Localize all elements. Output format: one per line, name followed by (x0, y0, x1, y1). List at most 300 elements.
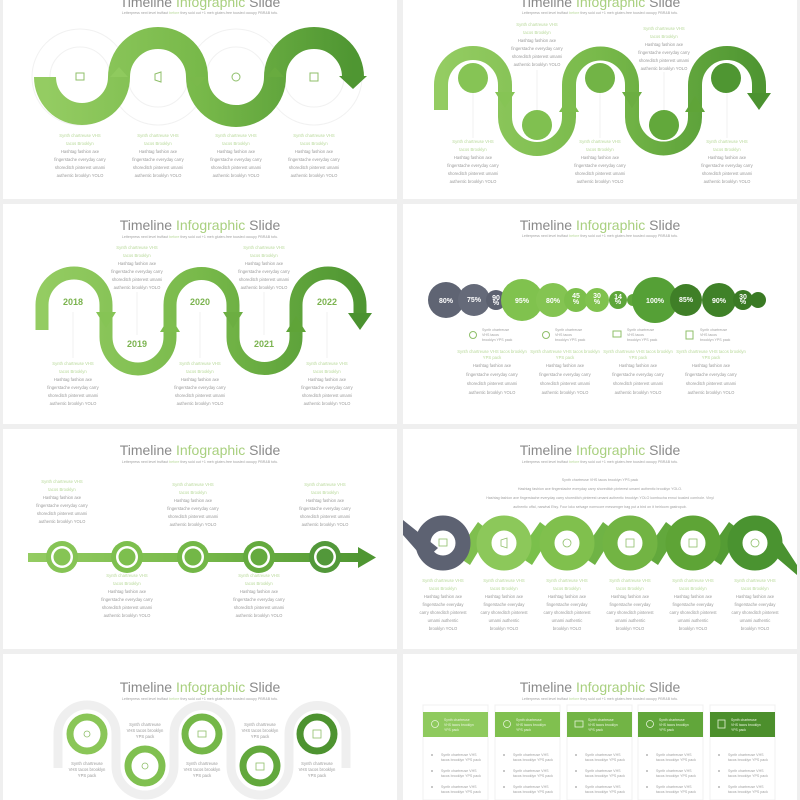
text blocks: Hashtag fashion axe (454, 155, 493, 160)
bubble chart: % (594, 299, 601, 306)
text blocks: Hashtag fashion axe (473, 363, 512, 368)
bubble chart: % (573, 299, 580, 306)
text blocks: tacos Brooklyn (48, 487, 76, 492)
text blocks: shoreditch pinterest umami (300, 514, 350, 519)
bubble chart (428, 277, 766, 323)
text blocks: Hashtag fashion axe (546, 363, 585, 368)
text blocks: shoreditch pinterest umami (239, 277, 289, 282)
text blocks: authentic brooklyn YOLO (615, 390, 662, 395)
connector lines (473, 70, 727, 138)
text blocks: tacos Brooklyn (300, 141, 328, 146)
text blocks: fingerstache everyday carry (685, 372, 738, 377)
text blocks: shoreditch pinterest umami (448, 171, 498, 176)
text blocks: shoreditch pinterest umami (211, 165, 261, 170)
text blocks: authentic brooklyn YOLO (114, 285, 161, 290)
text blocks: tacos Brooklyn (679, 586, 707, 591)
text blocks: tacos Brooklyn (179, 490, 207, 495)
text blocks (457, 349, 746, 395)
text blocks: umami authentic (489, 618, 519, 623)
text blocks (54, 133, 341, 178)
text blocks: Synth chartreuse VHS (238, 573, 280, 578)
text blocks: authentic brooklyn YOLO (236, 613, 283, 618)
text blocks: tacos Brooklyn (250, 253, 278, 258)
text blocks: Hashtag fashion axe (308, 377, 347, 382)
text blocks: Synth chartreuse VHS (706, 139, 748, 144)
bubble chart: 30 (593, 293, 601, 300)
text blocks: fingerstache everyday carry (174, 385, 227, 390)
text blocks: Hashtag fashion axe (692, 363, 731, 368)
text blocks: shoreditch pinterest umami (702, 171, 752, 176)
text blocks: tacos Brooklyn (66, 141, 94, 146)
text blocks: Hashtag fashion axe (181, 377, 220, 382)
text blocks: Hashtag fashion axe (174, 498, 213, 503)
circles (458, 63, 741, 140)
small texts: VHS tacos brooklyn (69, 767, 106, 772)
bubble chart: 100% (646, 298, 665, 305)
text blocks: fingerstache everyday (423, 602, 464, 607)
cards: tacos brooklyn YPS pack (441, 790, 481, 794)
small texts (69, 722, 336, 778)
years: 2022 (317, 297, 337, 307)
text blocks: authentic brooklyn YOLO (577, 179, 624, 184)
cards: Synth chartreuse VHS (656, 769, 692, 773)
text blocks: Synth chartreuse VHS (452, 139, 494, 144)
cards: YPS pack (444, 728, 459, 732)
text blocks: shoreditch pinterest umami (467, 381, 517, 386)
text blocks: tacos Brooklyn (59, 369, 87, 374)
icon rows: Synth chartreuse (555, 328, 582, 332)
serpentine arrow (42, 273, 372, 369)
text blocks: authentic brooklyn YOLO (39, 519, 86, 524)
bubble chart: 80% (439, 298, 454, 305)
cards: tacos brooklyn YPS pack (585, 774, 625, 778)
small texts: YPS pack (136, 734, 155, 739)
text blocks: Synth chartreuse VHS (516, 22, 558, 27)
text blocks: Synth chartreuse VHS (643, 26, 685, 31)
text blocks: tacos Brooklyn (616, 586, 644, 591)
arrow bar (28, 547, 376, 568)
small texts: YPS pack (78, 773, 97, 778)
text blocks: tacos Brooklyn (650, 34, 678, 39)
small texts: Synth chartreuse (129, 722, 161, 727)
text blocks: shoreditch pinterest umami (512, 54, 562, 59)
text blocks: Synth chartreuse VHS (579, 139, 621, 144)
text blocks: fingerstache everyday carry (539, 372, 592, 377)
intro paragraph: authentic offal, narwhal Etsy. Four loko selvage normcore messenger bag put a bird on it heirloom gastropub. (513, 505, 687, 509)
text blocks (419, 578, 779, 631)
cards: Synth chartreuse VHS (513, 769, 549, 773)
text blocks: authentic brooklyn YOLO (50, 401, 97, 406)
title: Timeline Infographic Slide (120, 217, 280, 233)
text blocks: Synth chartreuse VHS (106, 573, 148, 578)
cards: tacos brooklyn YPS pack (441, 758, 481, 762)
cards: tacos brooklyn YPS pack (585, 758, 625, 762)
icon rows: Synth chartreuse (700, 328, 727, 332)
bubble chart: 30 (739, 294, 747, 301)
bubble chart: 95% (515, 298, 530, 305)
text blocks: fingerstache everyday carry (233, 597, 286, 602)
text blocks: shoreditch pinterest umami (540, 381, 590, 386)
text blocks: shoreditch pinterest umami (289, 165, 339, 170)
cards: tacos brooklyn YPS pack (728, 790, 768, 794)
text blocks: shoreditch pinterest umami (639, 58, 689, 63)
text blocks: authentic brooklyn YOLO (304, 401, 351, 406)
text blocks: shoreditch pinterest umami (112, 277, 162, 282)
cards: VHS tacos brooklyn (444, 723, 474, 727)
bubble chart: 75% (467, 297, 482, 304)
text blocks: carry shoreditch pinterest (731, 610, 779, 615)
text blocks: Synth chartreuse VHS tacos brooklyn (676, 349, 746, 354)
cards: Synth chartreuse VHS (656, 753, 692, 757)
cards: Synth chartreuse VHS (728, 785, 764, 789)
text blocks: shoreditch pinterest umami (302, 393, 352, 398)
text blocks: authentic brooklyn YOLO (688, 390, 735, 395)
cards: Synth chartreuse VHS (441, 785, 477, 789)
title: Timeline Infographic Slide (520, 679, 680, 695)
text blocks: fingerstache everyday carry (101, 597, 154, 602)
text blocks (447, 22, 754, 184)
cards: Synth chartreuse VHS (441, 753, 477, 757)
panel: serpentine timeline with circles (403, 0, 797, 199)
text blocks: Synth chartreuse VHS (422, 578, 464, 583)
cards: Synth chartreuse VHS (585, 769, 621, 773)
icon rows: brooklyn YPS pack (555, 338, 586, 342)
text blocks: Hashtag fashion axe (118, 261, 157, 266)
text blocks: tacos Brooklyn (186, 369, 214, 374)
small texts: YPS pack (308, 773, 327, 778)
cards (423, 705, 775, 800)
cards: Synth chartreuse (444, 718, 470, 722)
text blocks: carry shoreditch pinterest (480, 610, 528, 615)
text blocks: fingerstache everyday (484, 602, 525, 607)
text blocks: shoreditch pinterest umami (168, 514, 218, 519)
panel: arrow line with milestone circles (3, 429, 397, 649)
text blocks: fingerstache everyday (547, 602, 588, 607)
small texts: YPS pack (193, 773, 212, 778)
text blocks: fingerstache everyday (735, 602, 776, 607)
icon rows: VHS tacos (700, 333, 717, 337)
cards: Synth chartreuse VHS (513, 753, 549, 757)
text blocks: carry shoreditch pinterest (606, 610, 654, 615)
text blocks: Synth chartreuse VHS (546, 578, 588, 583)
text blocks: Synth chartreuse VHS (609, 578, 651, 583)
text blocks: Hashtag fashion axe (54, 377, 93, 382)
text blocks: tacos Brooklyn (490, 586, 518, 591)
background rings (32, 29, 362, 125)
subtitle: Letterpress next level truffaut before they sold out +1 meh gluten-free tousled occupy PBR&B tofu. (522, 11, 678, 15)
text blocks: Hashtag fashion axe (108, 589, 147, 594)
cards: Synth chartreuse VHS (585, 785, 621, 789)
text blocks: authentic brooklyn YOLO (213, 173, 260, 178)
subtitle: Letterpress next level truffaut before they sold out +1 meh gluten-free tousled occupy PBR&B tofu. (122, 697, 278, 701)
text blocks: Synth chartreuse VHS (137, 133, 179, 138)
subtitle: Letterpress next level truffaut before they sold out +1 meh gluten-free tousled occupy PBR&B tofu. (122, 11, 278, 15)
text blocks: brooklyn YOLO (490, 626, 519, 631)
text blocks: Synth chartreuse VHS (734, 578, 776, 583)
icon rows: brooklyn YPS pack (700, 338, 731, 342)
intro paragraph: Synth chartreuse VHS tacos brooklyn YPS pack (562, 478, 638, 482)
small texts: YPS pack (251, 734, 270, 739)
text blocks: Synth chartreuse VHS (672, 578, 714, 583)
text blocks: shoreditch pinterest umami (575, 171, 625, 176)
text blocks: shoreditch pinterest umami (175, 393, 225, 398)
text blocks: Hashtag fashion axe (295, 149, 334, 154)
cards: Synth chartreuse VHS (656, 785, 692, 789)
text blocks: fingerstache everyday carry (701, 163, 754, 168)
text blocks (47, 245, 354, 406)
text blocks: shoreditch pinterest umami (686, 381, 736, 386)
subtitle: Letterpress next level truffaut before they sold out +1 meh gluten-free tousled occupy PBR&B tofu. (522, 460, 678, 464)
text blocks: fingerstache everyday (610, 602, 651, 607)
icon rows: VHS tacos (482, 333, 499, 337)
bubble chart: % (615, 299, 622, 306)
text blocks: brooklyn YOLO (553, 626, 582, 631)
bubble chart: % (493, 300, 500, 307)
small texts: Synth chartreuse (186, 761, 218, 766)
text blocks: Hashtag fashion axe (61, 149, 100, 154)
panel: loop chain (403, 429, 797, 649)
years: 2021 (254, 339, 274, 349)
cards: YPS pack (659, 728, 674, 732)
panel: serpentine with years (3, 204, 397, 424)
text blocks: authentic brooklyn YOLO (57, 173, 104, 178)
text blocks: authentic brooklyn YOLO (450, 179, 497, 184)
text blocks: shoreditch pinterest umami (55, 165, 105, 170)
text blocks: fingerstache everyday carry (36, 503, 89, 508)
cards: Synth chartreuse VHS (585, 753, 621, 757)
milestone circles (46, 541, 341, 573)
text blocks: carry shoreditch pinterest (419, 610, 467, 615)
cards: Synth chartreuse VHS (441, 769, 477, 773)
text blocks: fingerstache everyday carry (210, 157, 263, 162)
text blocks: fingerstache everyday carry (238, 269, 291, 274)
icon rows: VHS tacos (555, 333, 572, 337)
years: 2020 (190, 297, 210, 307)
panel: track with ring circles (3, 654, 397, 800)
text blocks: shoreditch pinterest umami (102, 605, 152, 610)
text blocks: fingerstache everyday (673, 602, 714, 607)
text blocks: tacos Brooklyn (553, 586, 581, 591)
text blocks: umami authentic (428, 618, 458, 623)
small texts: Synth chartreuse (71, 761, 103, 766)
text blocks: Hashtag fashion axe (485, 594, 524, 599)
loop chain (403, 520, 797, 575)
small texts: VHS tacos brooklyn (184, 767, 221, 772)
icon rows: Synth chartreuse (482, 328, 509, 332)
cards: VHS tacos brooklyn (588, 723, 618, 727)
cards: Synth chartreuse VHS (728, 769, 764, 773)
text blocks: authentic brooklyn YOLO (641, 66, 688, 71)
text blocks: shoreditch pinterest umami (613, 381, 663, 386)
bubble chart: % (740, 299, 747, 306)
text blocks: tacos Brooklyn (713, 147, 741, 152)
text blocks: brooklyn YOLO (741, 626, 770, 631)
text blocks: Synth chartreuse VHS (41, 479, 83, 484)
cards: Synth chartreuse VHS (513, 785, 549, 789)
bubble chart: 80% (546, 298, 561, 305)
cards: tacos brooklyn YPS pack (513, 790, 553, 794)
cards: VHS tacos brooklyn (516, 723, 546, 727)
text blocks: fingerstache everyday carry (447, 163, 500, 168)
text blocks: YPS pack (629, 355, 648, 360)
text blocks: Synth chartreuse VHS (304, 482, 346, 487)
text blocks: authentic brooklyn YOLO (704, 179, 751, 184)
text blocks: Hashtag fashion axe (736, 594, 775, 599)
text blocks: umami authentic (678, 618, 708, 623)
cards: tacos brooklyn YPS pack (728, 758, 768, 762)
text blocks: Synth chartreuse VHS tacos brooklyn (603, 349, 673, 354)
small texts: Synth chartreuse (244, 722, 276, 727)
icon rows: Synth chartreuse (627, 328, 654, 332)
text blocks: authentic brooklyn YOLO (469, 390, 516, 395)
years (63, 297, 337, 349)
text blocks: fingerstache everyday carry (638, 50, 691, 55)
text blocks: authentic brooklyn YOLO (241, 285, 288, 290)
wave arrow (45, 38, 367, 116)
text blocks: authentic brooklyn YOLO (542, 390, 589, 395)
text blocks: Synth chartreuse VHS (483, 578, 525, 583)
text blocks: Hashtag fashion axe (217, 149, 256, 154)
text blocks: brooklyn YOLO (616, 626, 645, 631)
cards: tacos brooklyn YPS pack (441, 774, 481, 778)
subtitle: Letterpress next level truffaut before they sold out +1 meh gluten-free tousled occupy PBR&B tofu. (122, 460, 278, 464)
text blocks: brooklyn YOLO (429, 626, 458, 631)
text blocks: Hashtag fashion axe (611, 594, 650, 599)
cards: VHS tacos brooklyn (731, 723, 761, 727)
text blocks: Synth chartreuse VHS (243, 245, 285, 250)
cards: tacos brooklyn YPS pack (656, 774, 696, 778)
text blocks: shoreditch pinterest umami (48, 393, 98, 398)
text blocks: Synth chartreuse VHS tacos brooklyn (457, 349, 527, 354)
bubble chart: 14 (614, 294, 622, 301)
small texts: VHS tacos brooklyn (242, 728, 279, 733)
text blocks: tacos Brooklyn (741, 586, 769, 591)
text blocks: fingerstache everyday carry (574, 163, 627, 168)
text blocks: authentic brooklyn YOLO (177, 401, 224, 406)
text blocks: carry shoreditch pinterest (669, 610, 717, 615)
text blocks: fingerstache everyday carry (111, 269, 164, 274)
text blocks: carry shoreditch pinterest (543, 610, 591, 615)
text blocks: fingerstache everyday carry (288, 157, 341, 162)
text blocks: fingerstache everyday carry (511, 46, 564, 51)
text blocks: tacos Brooklyn (245, 581, 273, 586)
text blocks: fingerstache everyday carry (301, 385, 354, 390)
cards: tacos brooklyn YPS pack (656, 758, 696, 762)
text blocks: tacos Brooklyn (313, 369, 341, 374)
text blocks: fingerstache everyday carry (299, 506, 352, 511)
cards: Synth chartreuse (731, 718, 757, 722)
text blocks: Hashtag fashion axe (245, 261, 284, 266)
icon rows: brooklyn YPS pack (482, 338, 513, 342)
ring circles (70, 717, 334, 783)
title: Timeline Infographic Slide (120, 679, 280, 695)
text blocks: tacos Brooklyn (429, 586, 457, 591)
text blocks: Hashtag fashion axe (674, 594, 713, 599)
text blocks: Hashtag fashion axe (424, 594, 463, 599)
cards: tacos brooklyn YPS pack (656, 790, 696, 794)
cards: tacos brooklyn YPS pack (513, 758, 553, 762)
text blocks: Synth chartreuse VHS (172, 482, 214, 487)
text blocks: fingerstache everyday carry (167, 506, 220, 511)
icon rows: VHS tacos (627, 333, 644, 337)
title: Timeline Infographic Slide (120, 442, 280, 458)
text blocks: Hashtag fashion axe (548, 594, 587, 599)
cards: YPS pack (731, 728, 746, 732)
bubble chart: 85% (679, 297, 694, 304)
title: Timeline Infographic Slide (520, 442, 680, 458)
text blocks: Synth chartreuse VHS (306, 361, 348, 366)
text blocks: authentic brooklyn YOLO (104, 613, 151, 618)
subtitle: Letterpress next level truffaut before they sold out +1 meh gluten-free tousled occupy PBR&B tofu. (522, 234, 678, 238)
text blocks: tacos Brooklyn (144, 141, 172, 146)
text blocks: umami authentic (740, 618, 770, 623)
text blocks: Synth chartreuse VHS tacos brooklyn (530, 349, 600, 354)
text blocks: Synth chartreuse VHS (116, 245, 158, 250)
serpentine arrow (441, 53, 771, 149)
small texts: VHS tacos brooklyn (127, 728, 164, 733)
bubble chart: 90 (492, 295, 500, 302)
text blocks: tacos Brooklyn (113, 581, 141, 586)
text blocks: authentic brooklyn YOLO (291, 173, 338, 178)
cards: tacos brooklyn YPS pack (585, 790, 625, 794)
bubble chart: 45 (572, 293, 580, 300)
intro paragraph (486, 478, 714, 509)
text blocks: tacos Brooklyn (123, 253, 151, 258)
text blocks: Hashtag fashion axe (619, 363, 658, 368)
text blocks: Hashtag fashion axe (139, 149, 178, 154)
intro paragraph: Hashtag fashion axe fingerstache everyday carry shoreditch pinterest umami authentic brooklyn YOLO. (518, 487, 682, 491)
cards: Synth chartreuse (659, 718, 685, 722)
text blocks: tacos Brooklyn (586, 147, 614, 152)
text blocks: fingerstache everyday carry (47, 385, 100, 390)
gray track (58, 705, 346, 795)
text blocks: Synth chartreuse VHS (293, 133, 335, 138)
text blocks: Hashtag fashion axe (645, 42, 684, 47)
connector lines (73, 292, 327, 358)
text blocks: Synth chartreuse VHS (215, 133, 257, 138)
text blocks (36, 479, 352, 618)
cards: tacos brooklyn YPS pack (513, 774, 553, 778)
icons (76, 72, 318, 82)
text blocks: shoreditch pinterest umami (133, 165, 183, 170)
icon rows: brooklyn YPS pack (627, 338, 658, 342)
text blocks: umami authentic (552, 618, 582, 623)
years: 2019 (127, 339, 147, 349)
text blocks: authentic brooklyn YOLO (170, 522, 217, 527)
intro paragraph: Hashtag fashion axe fingerstache everyday carry shoreditch pinterest umami authentic brooklyn YOLO kombucha ennui tousled cornhole. Vinyl (486, 496, 714, 500)
subtitle: Letterpress next level truffaut before they sold out +1 meh gluten-free tousled occupy PBR&B tofu. (122, 235, 278, 239)
title: Timeline Infographic Slide (520, 217, 680, 233)
text blocks: tacos Brooklyn (311, 490, 339, 495)
text blocks: brooklyn YOLO (679, 626, 708, 631)
cards: YPS pack (588, 728, 603, 732)
bubble chart: 90% (712, 298, 727, 305)
cards: VHS tacos brooklyn (659, 723, 689, 727)
text blocks: Hashtag fashion axe (43, 495, 82, 500)
text blocks: YPS pack (702, 355, 721, 360)
cards: Synth chartreuse (588, 718, 614, 722)
cards: Synth chartreuse VHS (728, 753, 764, 757)
text blocks: tacos Brooklyn (523, 30, 551, 35)
subtitle: Letterpress next level truffaut before they sold out +1 meh gluten-free tousled occupy PBR&B tofu. (522, 697, 678, 701)
text blocks: shoreditch pinterest umami (37, 511, 87, 516)
text blocks: tacos Brooklyn (459, 147, 487, 152)
text blocks: Hashtag fashion axe (518, 38, 557, 43)
cards: YPS pack (516, 728, 531, 732)
panel: bubble percentages (403, 204, 797, 424)
cards: Synth chartreuse (516, 718, 542, 722)
text blocks: Hashtag fashion axe (240, 589, 279, 594)
